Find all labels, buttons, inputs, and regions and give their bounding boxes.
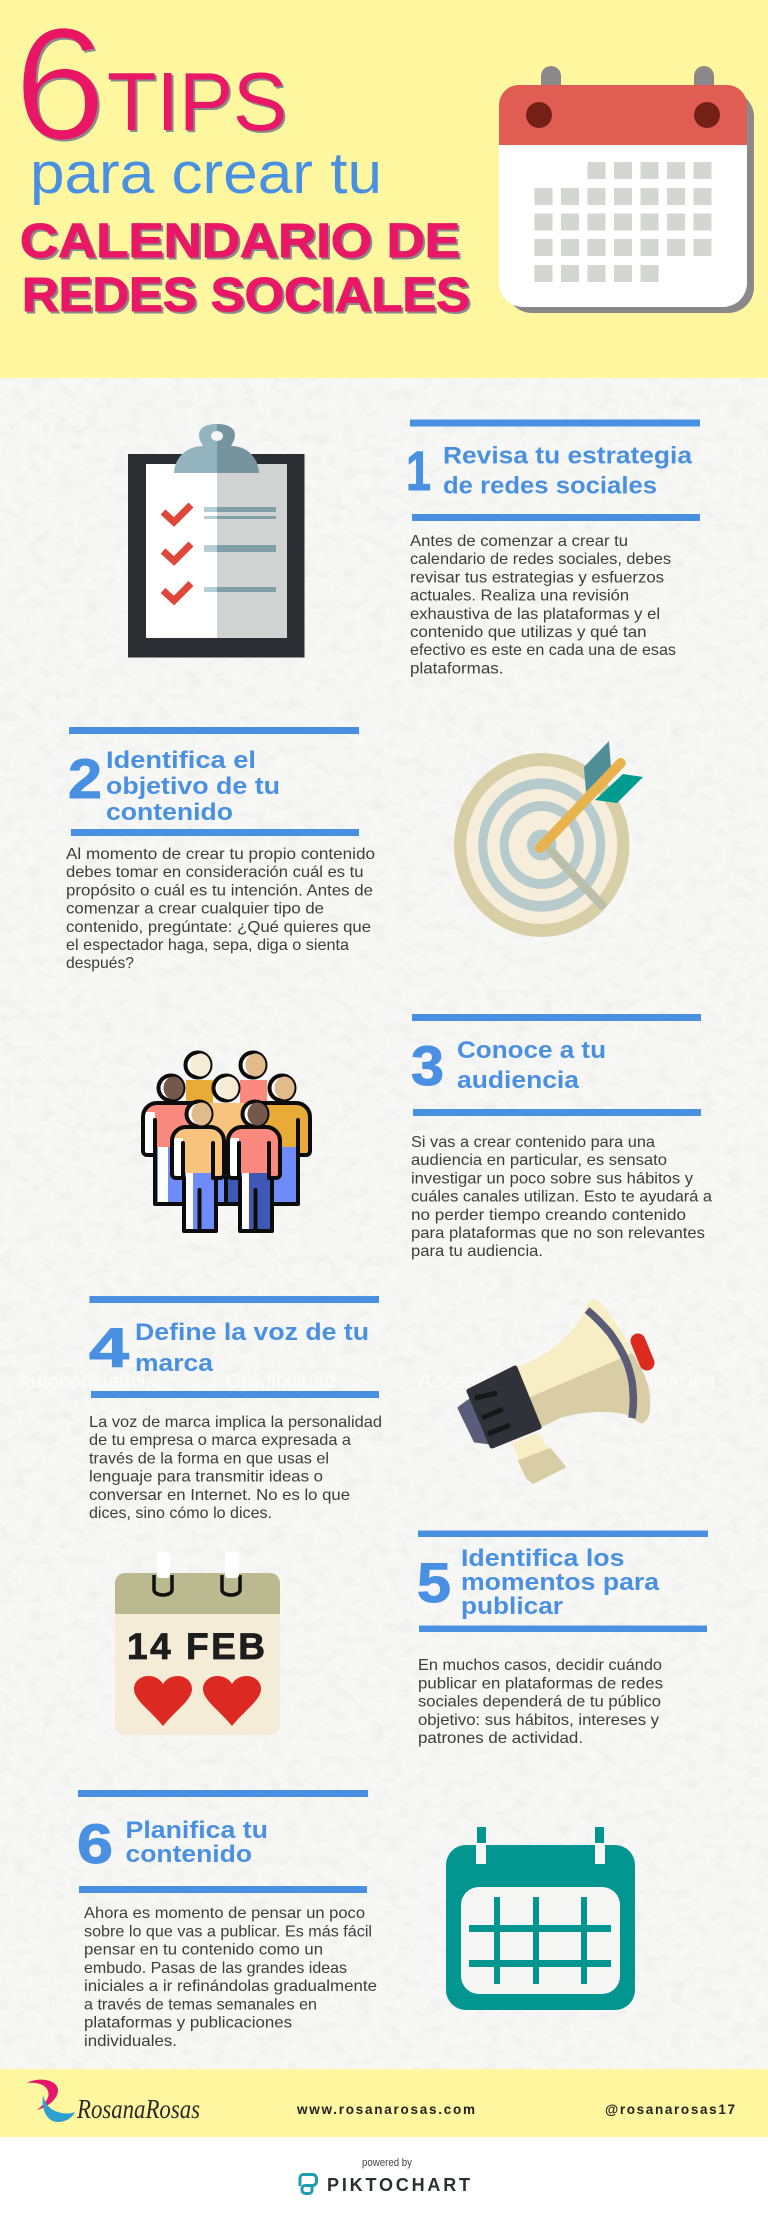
body text 1: calendario de redes sociales, debes xyxy=(410,551,671,568)
heading 3 xyxy=(457,1037,606,1094)
heading 6: Planifica tu xyxy=(126,1817,268,1844)
middle row xyxy=(143,1076,310,1204)
front right person xyxy=(228,1102,280,1231)
body text 5: objetivo: sus hábitos, intereses y xyxy=(418,1712,659,1729)
heading 1 xyxy=(443,442,693,500)
body text 1: efectivo es este en cada una de esas xyxy=(410,642,676,659)
hearts xyxy=(134,1676,261,1726)
body text 2: propósito o cuál es tu intención. Antes de xyxy=(66,882,373,899)
heading 5: Identifica los xyxy=(461,1545,624,1572)
social handle: @rosanarosas17 xyxy=(605,2102,735,2117)
body text 2: después? xyxy=(66,955,134,972)
footer band xyxy=(0,2069,768,2137)
body text 1: Antes de comenzar a crear tu xyxy=(410,533,628,550)
front left person xyxy=(172,1102,224,1231)
heading 3: audiencia xyxy=(457,1067,580,1094)
section 4 xyxy=(89,1296,382,1522)
body text 3: no perder tiempo creando contenido xyxy=(411,1207,686,1224)
heading 5: publicar xyxy=(461,1593,563,1620)
heading 1: de redes sociales xyxy=(443,472,657,500)
body text 4: conversar en Internet. No es lo que xyxy=(89,1487,350,1504)
number 1: 1 xyxy=(406,439,431,502)
header panel xyxy=(0,0,768,378)
body text 2: el espectador haga, sepa, diga o sienta xyxy=(66,937,349,954)
body text 6: plataformas y publicaciones xyxy=(84,2014,292,2032)
heading 5 xyxy=(461,1545,660,1620)
title: CALENDARIO DE xyxy=(20,215,460,268)
body text 2: contenido, pregúntate: ¿Qué quieres que xyxy=(66,919,371,936)
heading 5: momentos para xyxy=(461,1569,660,1596)
body text 6: pensar en tu contenido como un xyxy=(84,1942,323,1958)
body text 3: para plataformas que no son relevantes xyxy=(411,1225,705,1242)
icon: clipboard checklist xyxy=(128,424,304,658)
faint background labels: Autoconciencia xyxy=(17,1371,158,1393)
body text 4: lenguaje para transmitir ideas o xyxy=(89,1469,323,1486)
body text 2: debes tomar en consideración cuál es tu xyxy=(66,864,364,881)
powered by Piktochart: powered by xyxy=(362,2157,412,2169)
powered by Piktochart xyxy=(300,2157,470,2195)
body text 6: Ahora es momento de pensar un poco xyxy=(84,1905,365,1922)
faint background labels: Credibilidad xyxy=(226,1371,336,1393)
faint background labels xyxy=(17,1371,715,1393)
heading 4: Define la voz de tu xyxy=(135,1319,369,1346)
icon: calendar xyxy=(499,66,754,313)
body text 1: plataformas. xyxy=(410,660,504,677)
logo: Rosana Rosas: RosanaRosas xyxy=(76,2094,200,2124)
faint background labels: Accesibilidad xyxy=(418,1371,543,1393)
body text 4: de tu empresa o marca expresada a xyxy=(89,1432,351,1449)
body text 3 xyxy=(411,1134,712,1260)
body text 4 xyxy=(89,1414,382,1522)
body text 1: exhaustiva de las plataformas y el xyxy=(410,606,660,623)
icon: audience group xyxy=(143,1052,310,1231)
number 6: 6 xyxy=(77,1812,113,1875)
number 5: 5 xyxy=(417,1551,451,1614)
back row xyxy=(186,1052,267,1104)
powered by Piktochart: PIKTOCHART xyxy=(327,2175,470,2195)
heading 2: objetivo de tu xyxy=(106,773,280,800)
icon: target with arrow xyxy=(454,741,643,937)
body text 3: para tu audiencia. xyxy=(411,1243,543,1260)
number 3: 3 xyxy=(411,1034,444,1097)
body text 5: publicar en plataformas de redes xyxy=(418,1675,663,1692)
heading 4: marca xyxy=(135,1350,214,1377)
icon: 14 FEB calendar: 14 FEB xyxy=(127,1626,265,1667)
number 4: 4 xyxy=(89,1316,129,1379)
body text 2: Al momento de crear tu propio contenido xyxy=(66,846,375,863)
number 2: 2 xyxy=(68,747,102,810)
heading 2: Identifica el xyxy=(106,747,256,774)
body text 6: iniciales a ir refinándolas gradualmente xyxy=(84,1978,377,1995)
body text 2: comenzar a crear cualquier tipo de xyxy=(66,901,324,918)
icon: Piktochart logo xyxy=(300,2174,316,2194)
body text 3: investigar un poco sobre sus hábitos y xyxy=(411,1170,693,1187)
section 2 xyxy=(66,727,375,972)
heading 6 xyxy=(126,1817,268,1868)
website: www.rosanarosas.com xyxy=(296,2102,475,2117)
logo: Rosana Rosas xyxy=(27,2080,200,2124)
body text 6: embudo. Pasas de las grandes ideas xyxy=(84,1960,347,1977)
body text 6 xyxy=(84,1905,377,2050)
heading 6: contenido xyxy=(126,1841,252,1868)
icon: teal calendar xyxy=(446,1827,635,2010)
body text 1: actuales. Realiza una revisión xyxy=(410,588,629,605)
body text 2 xyxy=(66,846,375,972)
title xyxy=(14,0,470,322)
body text 3: cuáles canales utilizan. Esto te ayudará a xyxy=(411,1189,712,1206)
body text 3: Si vas a crear contenido para una xyxy=(411,1134,655,1151)
section 5 xyxy=(417,1530,708,1747)
body text 4: dices, sino cómo lo dices. xyxy=(89,1505,272,1522)
icon: 14 FEB calendar xyxy=(115,1552,280,1735)
body text 5: sociales dependerá de tu público xyxy=(418,1694,661,1710)
body text 5: patrones de actividad. xyxy=(418,1730,583,1747)
body text 3: audiencia en particular, es sensato xyxy=(411,1152,667,1169)
heading 4 xyxy=(135,1319,369,1377)
section 3 xyxy=(411,1014,712,1260)
body text 4: La voz de marca implica la personalidad xyxy=(89,1414,382,1431)
textured panel background xyxy=(0,378,768,2069)
heading 2 xyxy=(106,747,280,826)
faint background labels: Comunicación xyxy=(590,1371,715,1393)
icon: megaphone xyxy=(459,1299,650,1483)
title: TIPS xyxy=(107,55,287,148)
heading 1: Revisa tu estrategia xyxy=(443,442,693,470)
body text 1: revisar tus estrategias y esfuerzos xyxy=(410,569,664,586)
body text 6: a través de temas semanales en xyxy=(84,1996,317,2013)
subtitle: para crear tu xyxy=(30,141,382,206)
heading 2: contenido xyxy=(106,799,233,826)
body text 5: En muchos casos, decidir cuándo xyxy=(418,1657,662,1674)
body text 1 xyxy=(410,533,676,677)
section 1 xyxy=(406,420,700,677)
section 6 xyxy=(77,1790,377,2050)
heading 3: Conoce a tu xyxy=(457,1037,606,1064)
body text 1: contenido que utilizas y qué tan xyxy=(410,624,646,641)
body text 6: sobre lo que vas a publicar. Es más fácil xyxy=(84,1923,372,1940)
title: REDES SOCIALES xyxy=(22,269,470,322)
body text 4: través de la forma en que usas el xyxy=(89,1450,329,1467)
body text 5 xyxy=(418,1657,663,1747)
body text 6: individuales. xyxy=(84,2033,177,2050)
